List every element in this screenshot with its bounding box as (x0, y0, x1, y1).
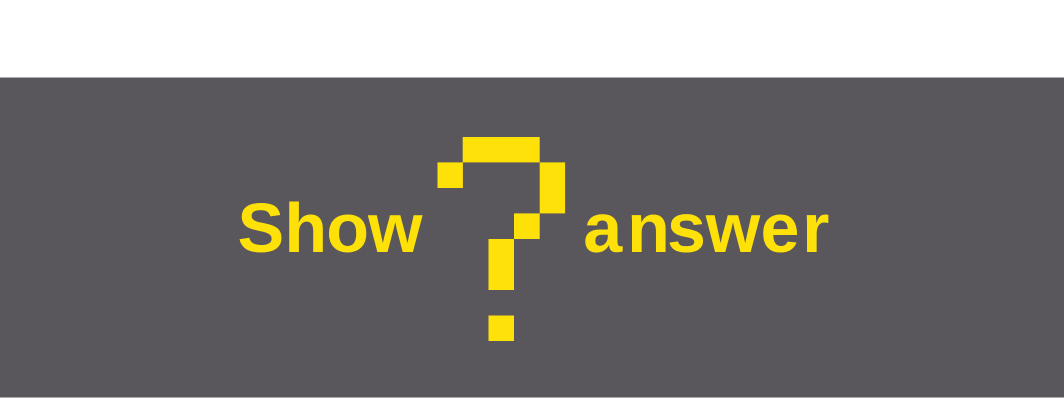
panel: dark grey banner (0, 78, 1064, 398)
label: Show: Show (238, 189, 423, 267)
icon: pixel question mark (438, 137, 565, 341)
label: answer: answer (583, 189, 829, 267)
